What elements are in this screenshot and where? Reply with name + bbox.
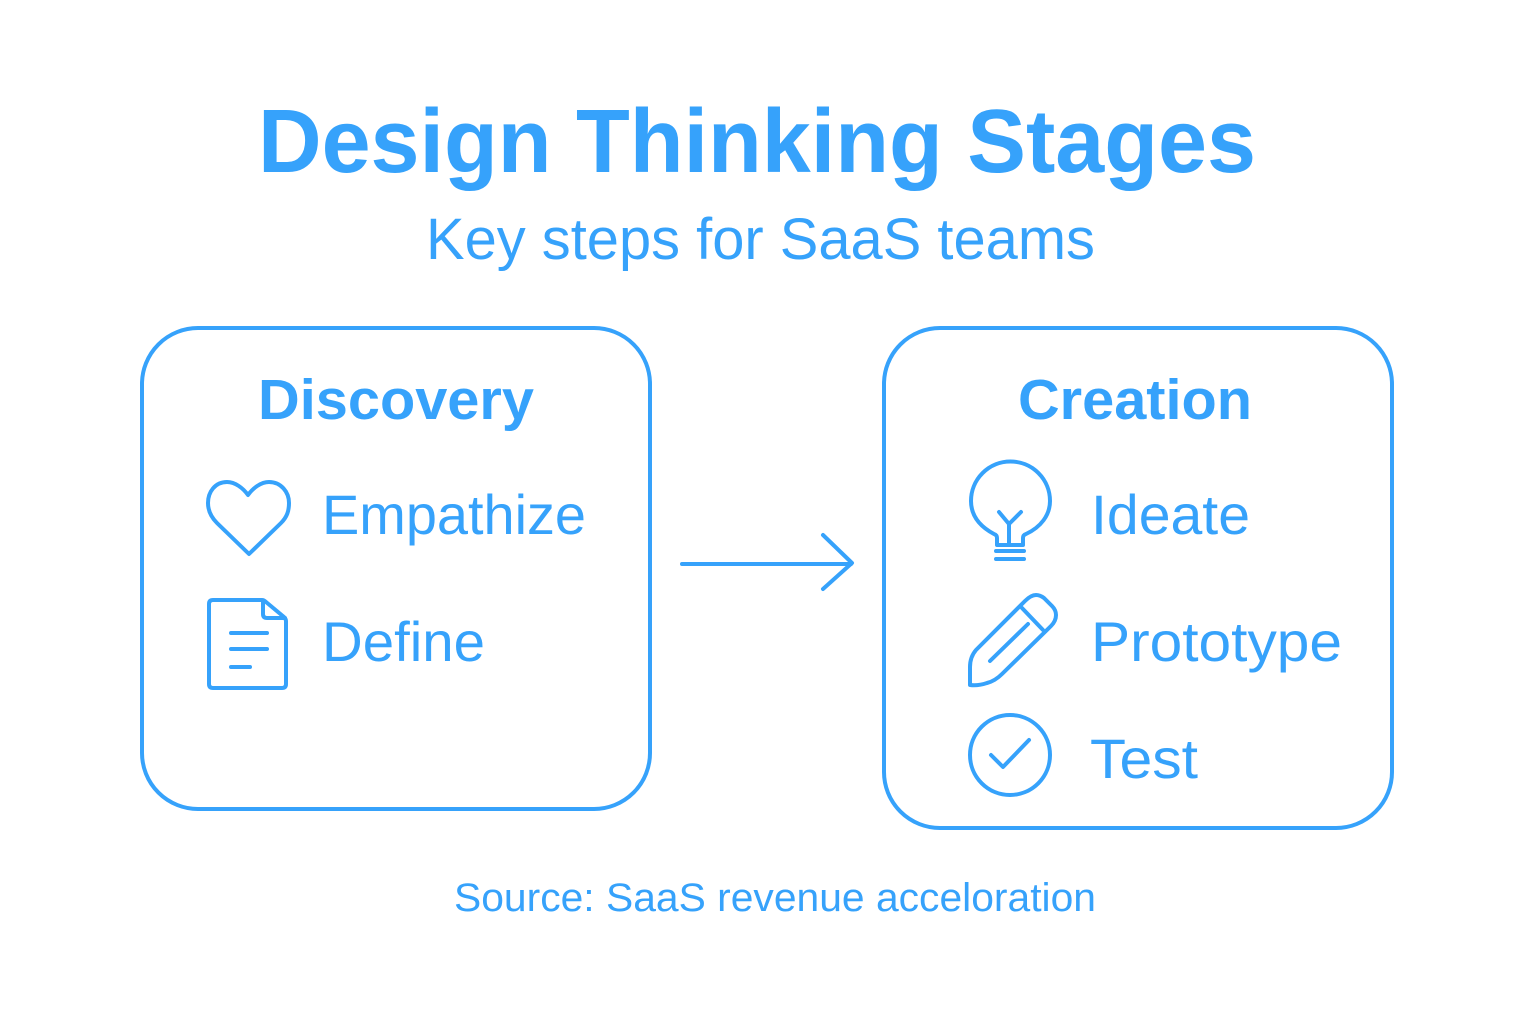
icon: document — [209, 600, 286, 688]
label: define: Define — [322, 610, 485, 673]
icon: heart — [208, 482, 289, 554]
icon: pencil — [970, 595, 1056, 685]
icon: check circle — [970, 715, 1050, 795]
heading: creation: Creation — [1018, 368, 1252, 432]
label: test: Test — [1090, 727, 1198, 790]
label: ideate: Ideate — [1091, 483, 1250, 546]
heading: discovery: Discovery — [258, 368, 534, 432]
panel: creation — [884, 328, 1392, 828]
subtitle: Key steps for SaaS teams — [426, 207, 1095, 272]
source note: Source: SaaS revenue acceloration — [454, 876, 1096, 920]
title: Design Thinking Stages — [258, 92, 1256, 192]
label: prototype: Prototype — [1091, 610, 1342, 673]
icon: lightbulb — [971, 462, 1050, 559]
arrow — [682, 535, 852, 589]
panel: discovery — [142, 328, 650, 809]
label: empathize: Empathize — [322, 483, 586, 546]
